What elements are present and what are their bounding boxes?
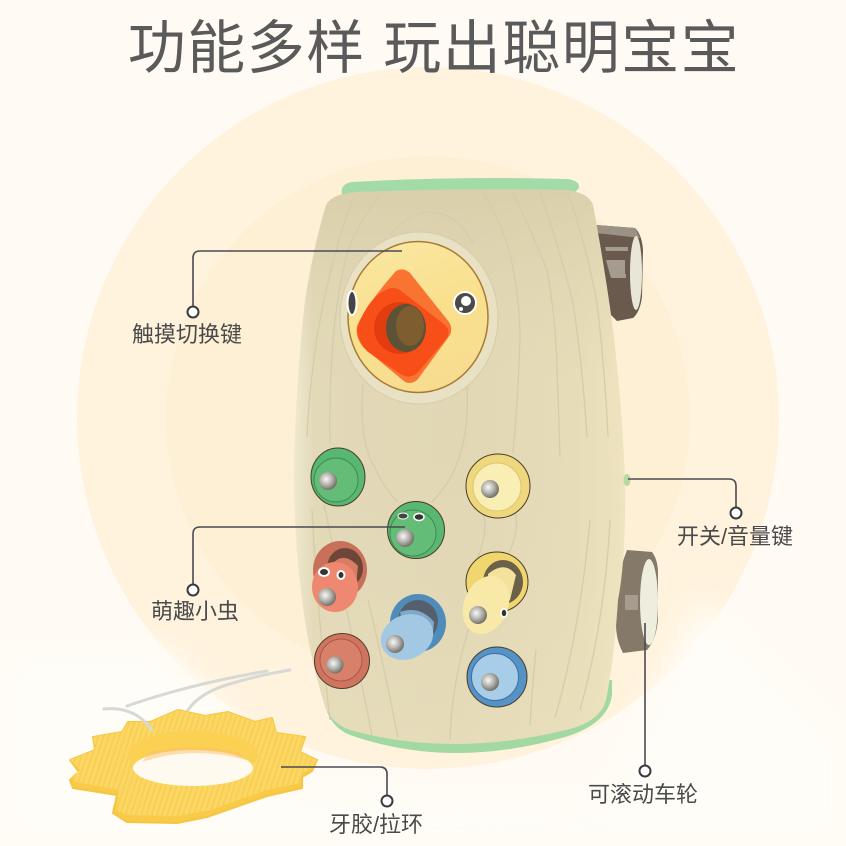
toy: right wheel bottom	[616, 550, 658, 653]
toy: top rim	[342, 178, 579, 198]
bug: yellow top right	[466, 454, 530, 518]
duck right eye	[454, 292, 476, 314]
string	[127, 670, 290, 710]
label: wheels: 可滚动车轮	[588, 782, 698, 807]
duck left eye	[348, 291, 356, 315]
toy: right wheel top	[596, 225, 643, 321]
duck head button	[340, 232, 498, 404]
callouts	[193, 251, 736, 795]
teether ring	[70, 710, 317, 823]
label: teether: 牙胶/拉环	[329, 812, 423, 837]
toy: trunk body	[294, 189, 625, 744]
bugs	[311, 448, 530, 707]
bug: yellow extended	[454, 552, 528, 641]
bug: green center	[388, 502, 444, 558]
bug: green top left	[311, 448, 365, 506]
bug: red extended	[312, 541, 367, 612]
label: touch switch: 触摸切换键	[132, 322, 242, 347]
bug: blue lower	[467, 647, 527, 707]
duck beak	[357, 269, 451, 383]
switch button	[624, 474, 630, 486]
label: power volume: 开关/音量键	[677, 524, 793, 549]
title: 功能多样 玩出聪明宝宝	[128, 16, 740, 81]
label: bugs: 萌趣小虫	[151, 599, 239, 624]
toy: green base	[322, 680, 612, 753]
trunk wood grain	[307, 190, 610, 740]
bug: blue extended	[373, 594, 446, 668]
string hook	[104, 709, 152, 730]
bug: red lower	[314, 634, 370, 688]
